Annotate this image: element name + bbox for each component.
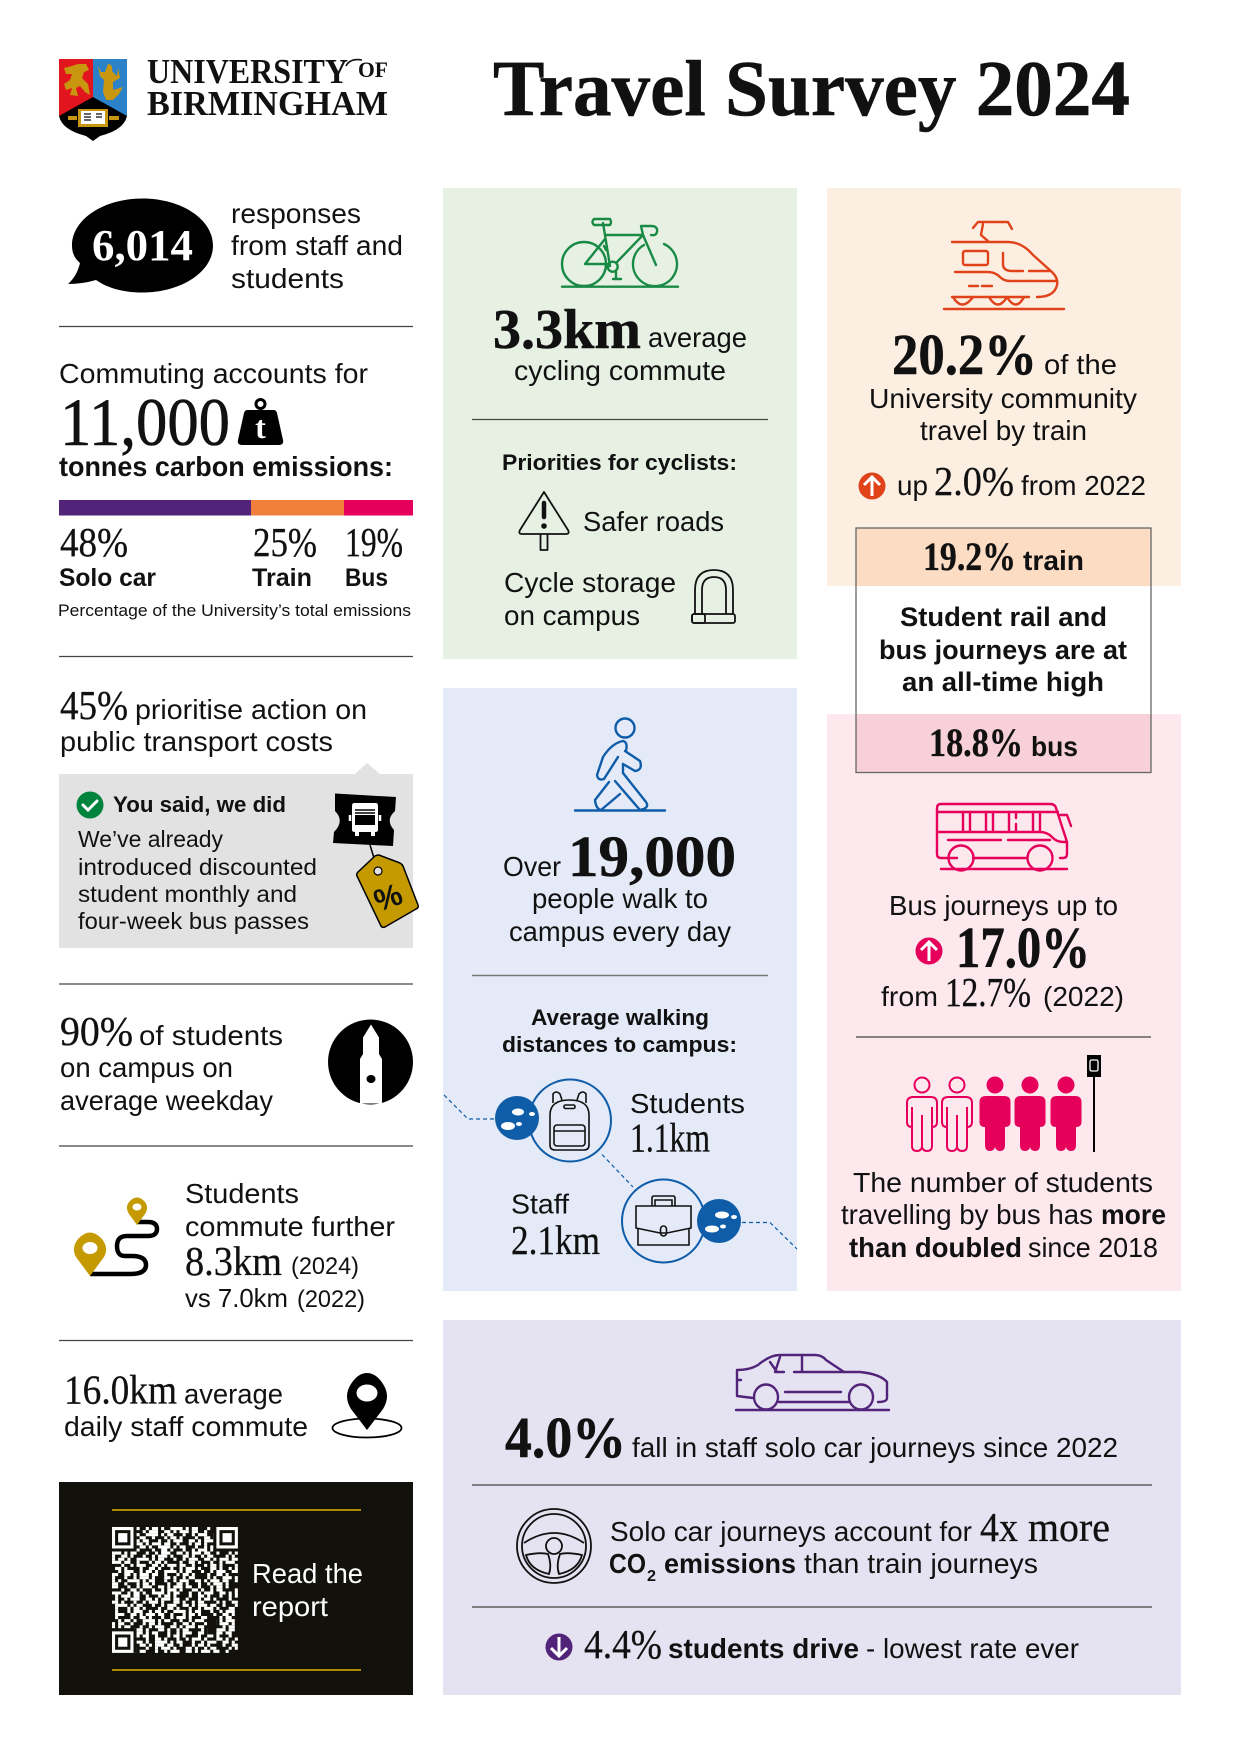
panel: public transport costs — [59, 682, 418, 948]
stat: 19,000 walkers: campus every day — [509, 916, 731, 947]
text: students commute further: commute further — [185, 1211, 395, 1242]
icon: university shield — [59, 59, 127, 141]
text: students travelling by bus: than doubled — [849, 1232, 1022, 1263]
text: read the report: report — [252, 1591, 328, 1622]
stat: 3.3km cycling commute: cycling commute — [514, 355, 726, 386]
legend: train: Train — [252, 564, 312, 592]
icon: walking person — [575, 718, 665, 810]
icon: clock tower — [328, 1020, 413, 1104]
text: students 1.1km — [630, 1088, 745, 1160]
stat: 19.2% train: train — [1023, 545, 1084, 576]
text: 4x more CO2 emissions: more — [1028, 1504, 1110, 1550]
text: students commute further: Students — [185, 1178, 299, 1209]
heading: commuting emissions: 11,000 — [60, 384, 230, 460]
stat: 4.0% fall: 4.0% — [505, 1405, 626, 1470]
legend: solo car — [59, 519, 156, 592]
stat: 18.8% bus: bus — [1031, 731, 1078, 762]
panel: student commute distance — [74, 1178, 395, 1313]
text: 90 percent of students — [60, 1008, 283, 1116]
panel: car — [443, 1320, 1181, 1695]
stat: 19,000 walkers: Over — [503, 851, 561, 882]
panel: staff commute — [64, 1366, 402, 1442]
legend: solo car: 48% — [60, 519, 128, 565]
text: 45 percent prioritise — [60, 682, 367, 757]
legend: train — [252, 519, 317, 592]
text: students 1.1km: Students — [630, 1088, 745, 1119]
text: 4x more CO2 emissions: 2 — [647, 1568, 656, 1585]
icon: bicycle — [562, 219, 678, 287]
text: staff 2.1km: 2.1km — [511, 1217, 600, 1263]
icon: check mark — [76, 792, 104, 818]
icon: discount tag: % — [369, 876, 407, 919]
stat: 19,000 walkers: people walk to — [532, 883, 708, 914]
text: callout body — [78, 792, 317, 934]
text: staff 2.1km — [511, 1188, 600, 1263]
text: wordmark: OF — [358, 57, 388, 82]
panel: cycling — [443, 188, 797, 659]
legend: bus: Bus — [345, 564, 388, 592]
text: read the report — [252, 1558, 363, 1622]
stat: 19.2% train — [923, 534, 1084, 579]
heading: average walking distances: distances to campus: — [502, 1032, 737, 1057]
text: callout body: You said, we did — [113, 792, 286, 817]
heading: commuting emissions — [59, 358, 393, 482]
stat: bus journeys 17.0%: 17.0% — [956, 915, 1090, 980]
text: up 2.0% from 2022: 2.0% — [934, 458, 1014, 504]
callout box: student rail and bus journeys — [856, 528, 1151, 772]
icon: bus ticket — [333, 794, 396, 846]
QR code — [112, 1527, 238, 1653]
panel: train — [827, 188, 1181, 586]
text: responses from staff and students: students — [231, 263, 344, 294]
text: cycle storage on campus: Cycle storage — [504, 567, 676, 598]
text: cycle storage on campus — [504, 567, 676, 631]
text: 4.4% students drive — [584, 1621, 1079, 1667]
stat: bus journeys 17.0%: (2022) — [1043, 981, 1124, 1012]
icon: map pin — [332, 1373, 402, 1438]
text: 4x more CO2 emissions: emissions — [664, 1548, 796, 1579]
heading: average walking distances: Average walking — [531, 1005, 709, 1030]
text: 4x more CO2 emissions — [609, 1504, 1110, 1585]
stat: 20.2% by train: University community — [869, 383, 1137, 414]
title: Travel Survey 2024 — [493, 46, 1130, 133]
icon: warning sign — [519, 492, 569, 550]
text: students travelling by bus: travelling by bus has — [841, 1199, 1093, 1230]
heading: priorities for cyclists: Priorities for cyclists: — [502, 450, 737, 475]
legend: solo car: Solo car — [59, 564, 156, 592]
stat: 4.0% fall — [505, 1405, 1118, 1470]
icon: discount tag — [357, 845, 418, 927]
text: 4x more CO2 emissions: 4x — [980, 1504, 1018, 1550]
text: students commute further: (2024) — [291, 1253, 359, 1280]
icon: bus — [937, 804, 1071, 870]
stat: bus journeys 17.0%: from — [881, 981, 938, 1012]
stat: 18.8% bus: 18.8% — [929, 720, 1023, 765]
icon: down arrow — [546, 1634, 572, 1660]
text: students commute further: 8.3km — [185, 1238, 282, 1284]
legend: train: 25% — [253, 519, 317, 565]
stat: bus journeys 17.0%: 12.7% — [945, 969, 1031, 1015]
text: callout body: four-week bus passes — [78, 908, 309, 934]
icon: speech bubble with number — [68, 198, 213, 292]
icon: steering wheel — [517, 1509, 591, 1583]
text: students travelling by bus: more — [1101, 1199, 1166, 1230]
text: 16km staff commute: 16.0km — [64, 1366, 177, 1412]
panel: walking — [443, 688, 797, 1291]
text: students travelling by bus — [841, 1167, 1166, 1263]
legend: bus — [345, 519, 403, 592]
stat: 19.2% train: 19.2% — [923, 534, 1016, 579]
icon: tonne weight: t — [255, 409, 266, 445]
text: 16km staff commute: average — [184, 1378, 283, 1410]
icon: tonne weight — [238, 400, 283, 445]
stat: 3.3km cycling commute: average — [648, 322, 747, 353]
text: cycle storage on campus: on campus — [504, 600, 640, 631]
text: all-time high — [879, 602, 1127, 697]
text: 16km staff commute: daily staff commute — [64, 1411, 308, 1442]
text: safer roads: Safer roads — [583, 506, 724, 537]
text: wordmark: BIRMINGHAM — [147, 84, 388, 123]
text: students commute further: vs 7.0km — [185, 1283, 288, 1313]
icon: people at bus stop — [907, 1055, 1101, 1152]
text: callout body: student monthly and — [78, 881, 297, 907]
text: 90 percent of students: of students — [139, 1020, 283, 1051]
stat: 3.3km cycling commute: 3.3km — [493, 299, 641, 361]
text: students travelling by bus: since 2018 — [1028, 1232, 1158, 1263]
stat: 20.2% by train: 20.2% — [892, 322, 1037, 387]
stat: 20.2% by train: of the — [1044, 349, 1117, 380]
text: 4x more CO2 emissions: Solo car journeys account for — [610, 1516, 972, 1547]
text: up 2.0% from 2022: from 2022 — [1021, 470, 1146, 501]
panel: responses — [68, 198, 403, 294]
text: 45 percent prioritise: prioritise action on — [135, 694, 367, 725]
text: callout body: We’ve already — [78, 826, 223, 852]
heading: commuting emissions: tonnes carbon emissions: — [59, 451, 393, 482]
text: callout body: introduced discounted — [78, 854, 317, 880]
text: wordmark: UNIVERSITY — [147, 52, 348, 91]
stat: bus journeys 17.0%: Bus journeys up to — [889, 890, 1118, 921]
text: 4x more CO2 emissions: than train journeys — [804, 1548, 1038, 1579]
callout: you said, we did — [59, 763, 418, 948]
stat: 20.2% by train — [869, 322, 1137, 446]
text: up 2.0% from 2022: up — [897, 470, 928, 501]
caption: percentage note: Percentage of the University’s total emissions — [58, 601, 411, 620]
text: 16km staff commute — [64, 1366, 308, 1442]
stat: 20.2% by train: travel by train — [920, 415, 1087, 446]
stat: 4.0% fall: fall in staff solo car journeys since 2022 — [632, 1432, 1118, 1463]
heading: average walking distances — [502, 1005, 737, 1057]
text: responses from staff and students: responses — [231, 198, 361, 229]
text: 90 percent of students: 90% — [60, 1008, 133, 1054]
text: students commute further — [185, 1178, 395, 1313]
text: all-time high: bus journeys are at — [879, 635, 1127, 665]
stat: 19,000 walkers: 19,000 — [568, 824, 736, 889]
icon: staff briefcase — [622, 1180, 741, 1262]
text: all-time high: Student rail and — [900, 602, 1107, 632]
text: responses from staff and students: from staff and — [231, 230, 403, 261]
text: 45 percent prioritise: public transport costs — [60, 726, 333, 757]
text: responses from staff and students — [231, 198, 403, 294]
heading: commuting emissions: Commuting accounts for — [59, 358, 368, 389]
icon: speech bubble with number: 6,014 — [92, 221, 193, 270]
stat: bus journeys 17.0% — [881, 890, 1124, 1015]
chart: emissions share bar — [59, 500, 413, 516]
dotted walking route — [444, 1095, 797, 1249]
icon: train — [944, 222, 1064, 309]
icon: student backpack — [495, 1080, 611, 1162]
text: 90 percent of students: average weekday — [60, 1085, 273, 1116]
logo: University of Birmingham — [59, 52, 388, 141]
text: 45 percent prioritise: 45% — [60, 682, 128, 728]
icon: route with pins — [74, 1198, 157, 1276]
text: students commute further: (2022) — [297, 1286, 365, 1313]
text: students 1.1km: 1.1km — [630, 1114, 710, 1160]
text: wordmark — [147, 52, 388, 123]
legend: bus: 19% — [345, 519, 403, 565]
text: 4.4% students drive: students drive — [668, 1633, 859, 1664]
text: up 2.0% from 2022 — [897, 458, 1146, 504]
text: 4.4% students drive: 4.4% — [584, 1621, 662, 1667]
panel: bus — [827, 714, 1181, 1291]
text: 4x more CO2 emissions: CO — [609, 1548, 646, 1579]
icon: up arrow — [858, 472, 886, 500]
panel: read the report — [59, 1482, 413, 1695]
text: 90 percent of students: on campus on — [60, 1052, 233, 1083]
text: staff 2.1km: Staff — [511, 1188, 569, 1220]
stat: 19,000 walkers — [503, 824, 736, 947]
icon: car — [736, 1355, 889, 1410]
panel: carbon emissions — [58, 358, 413, 620]
panel: students on campus — [60, 1008, 413, 1116]
text: 4.4% students drive: - lowest rate ever — [866, 1633, 1079, 1664]
text: read the report: Read the — [252, 1558, 363, 1589]
stat: 3.3km cycling commute — [493, 299, 747, 386]
text: students travelling by bus: The number of students — [853, 1167, 1153, 1198]
text: all-time high: an all-time high — [902, 667, 1104, 697]
icon: bike lock — [692, 570, 735, 623]
